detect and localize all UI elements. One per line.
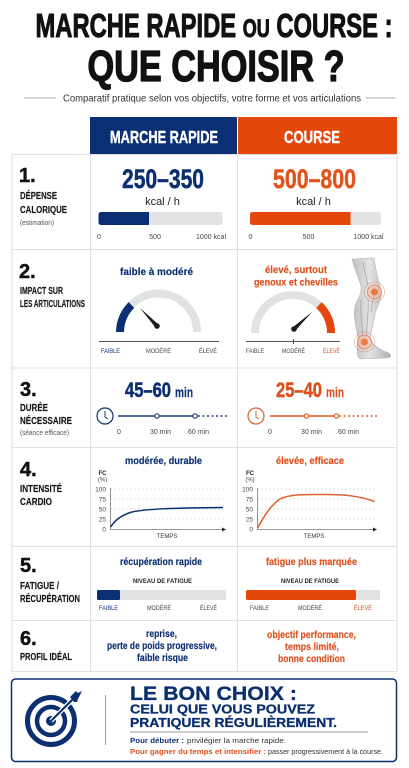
row 2 course: gauge: ÉLEVÉ [323, 346, 341, 355]
bar: calories marche [98, 212, 222, 225]
row 4 marche: line chart: 75 [99, 496, 106, 504]
row 1 label: dépense calorique: 1. [19, 165, 36, 187]
row 6 course: profile text [267, 629, 356, 665]
row 4 marche: line chart: TEMPS [157, 534, 177, 540]
needle [140, 308, 160, 329]
row 1 marche: calories: 1000 kcal [196, 234, 226, 241]
row 4 marche: line chart: 50 [99, 506, 106, 514]
row 2 marche: gauge: ÉLEVÉ [199, 346, 218, 355]
row 2 course: gauge: MODÉRÉ [282, 346, 306, 355]
row 3 marche: timeline: 60 min [188, 429, 209, 436]
row 4 course: line chart: 50 [246, 506, 253, 514]
row 3 marche: timeline: 30 min [150, 429, 171, 436]
bar: calories course [250, 212, 381, 225]
row 1 course: calories: kcal / h [296, 196, 331, 208]
row 3 course: timeline: 60 min [338, 429, 359, 436]
row 3 course: timeline: 30 min [301, 429, 322, 436]
row 4 marche: line chart: modérée, durable [125, 455, 202, 467]
row 4 label: intensité [20, 459, 62, 508]
row 1 marche: calories: kcal / h [145, 196, 180, 208]
row 3 course: timeline: min [326, 384, 344, 400]
row 4 course: line chart: FC [246, 471, 255, 477]
row 3 course: timeline [248, 379, 378, 436]
row 5 course: fatigue bar [246, 556, 380, 612]
row 5 course: fatigue bar: FAIBLE [250, 605, 270, 612]
row 2 marche: gauge: faible à modéré [120, 266, 193, 278]
callout heading [130, 684, 337, 730]
row 5 course: fatigue bar: NIVEAU DE FATIGUE [281, 578, 340, 585]
row 6 course: profile text: temps limité, [285, 641, 339, 653]
row 2 course: gauge: FAIBLE [246, 348, 265, 355]
row 3 marche: timeline: min [175, 384, 193, 400]
callout heading: PRATIQUER RÉGULIÈREMENT. [130, 715, 337, 730]
row 2 course: gauge: genoux et chevilles [254, 276, 338, 288]
row 1 course: calories: 500 [303, 234, 314, 241]
row 1 marche: calories: 500 [149, 234, 161, 241]
column header: course: COURSE [284, 127, 340, 147]
row 4 marche: line chart [95, 455, 226, 540]
callout advice [130, 736, 383, 756]
row 5 label: fatigue: FATIGUE / [20, 580, 59, 592]
row 4 course: line chart: élevée, efficace [276, 455, 344, 467]
row 4 marche: line chart: 25 [99, 516, 106, 524]
table grid [12, 154, 397, 672]
icon: leg with painful knee and ankle [352, 258, 391, 359]
row 4 course: line chart: 0 [249, 526, 253, 534]
row 4 course: line chart: 25 [246, 516, 253, 524]
column header: marche rapide: MARCHE RAPIDE [110, 127, 218, 147]
row 1 label: dépense calorique: DÉPENSE [20, 189, 57, 202]
row 3 label: durée: DURÉE [20, 401, 48, 414]
column header: marche rapide [90, 117, 237, 154]
ankle pain marker [354, 332, 374, 352]
row 3 label: durée: NÉCESSAIRE [20, 414, 72, 427]
row 4 label: intensité: CARDIO [20, 496, 52, 508]
row 1 label: dépense calorique [19, 165, 67, 227]
row 2 label: impact articulations: LES ARTICULATIONS [20, 298, 85, 310]
needle [291, 312, 312, 332]
row 3 course: timeline: 0 [268, 429, 272, 436]
row 2 label: impact articulations [19, 261, 85, 310]
row 5 course: fatigue bar: fatigue plus marquée [266, 556, 357, 568]
row 5 course: fatigue bar: ÉLEVÉ [354, 603, 373, 612]
row 4 label: intensité: INTENSITÉ [20, 482, 62, 495]
row 5 marche: fatigue bar: ÉLEVÉ [200, 603, 218, 612]
row 4 course: line chart: (%) [245, 478, 255, 484]
row 1 label: dépense calorique: (estimation) [20, 220, 54, 227]
row 3 label: durée: 3. [20, 379, 37, 401]
row 4 marche: line chart: 100 [95, 486, 106, 494]
row 5 label: fatigue [20, 555, 80, 605]
row 2 course: gauge: élevé, surtout [265, 264, 327, 276]
row 6 marche: profile text: reprise, [146, 628, 177, 640]
callout advice: Pour débuter : [130, 736, 184, 745]
row 6 label: profil idéal [20, 628, 72, 663]
row 6 label: profil idéal: PROFIL IDÉAL [20, 650, 72, 663]
column header: course [238, 117, 397, 154]
row 3 label: durée: (séance efficace) [20, 430, 69, 437]
row 6 course: profile text: objectif performance, [267, 629, 356, 641]
row 2 course: gauge [246, 264, 341, 355]
callout: le bon choix [12, 679, 396, 762]
icon: target with arrow [28, 691, 82, 744]
knee pain marker [364, 282, 384, 302]
row 2 label: impact articulations: 2. [19, 261, 36, 283]
row 3 course: timeline: 25–40 [276, 379, 322, 402]
row 3 marche: timeline: 45–60 [125, 379, 171, 402]
row 2 marche: gauge [99, 266, 219, 355]
callout advice: privilégier la marche rapide. [187, 736, 286, 745]
title [36, 7, 392, 91]
callout advice: passer progressivement à la course. [268, 747, 383, 756]
row 6 label: profil idéal: 6. [20, 628, 37, 650]
row 6 marche: profile text: faible risque [137, 652, 188, 664]
row 4 marche: line chart: 0 [102, 526, 106, 534]
row 1 marche: calories [97, 164, 226, 241]
row 5 course: fatigue bar: MODÉRÉ [298, 603, 323, 612]
row 1 course: calories: 0 [248, 234, 252, 241]
row 6 course: profile text: bonne condition [278, 653, 345, 665]
row 1 course: calories [248, 164, 384, 241]
subtitle: Comparatif pratique selon vos objectifs, votre forme et vos articulations [63, 94, 361, 104]
row 5 marche: fatigue bar [97, 556, 226, 612]
row 4 course: line chart: TEMPS [304, 534, 324, 540]
row 2 marche: gauge: MODÉRÉ [146, 346, 172, 355]
row 5 marche: fatigue bar: MODÉRÉ [147, 603, 172, 612]
row 4 course: line chart: 75 [246, 496, 253, 504]
row 3 marche: timeline [97, 379, 227, 436]
row 4 course: line chart: 100 [242, 486, 253, 494]
row 5 label: fatigue: RÉCUPÉRATION [20, 592, 80, 605]
row 4 marche: line chart: FC [98, 471, 107, 477]
row 1 label: dépense calorique: CALORIQUE [20, 204, 67, 216]
row 4 label: intensité: 4. [20, 459, 37, 481]
row 5 marche: fatigue bar: récupération rapide [120, 556, 202, 568]
row 1 marche: calories: 0 [97, 234, 101, 241]
callout advice: Pour gagner du temps et intensifier : [130, 747, 266, 756]
row 6 marche: profile text: perte de poids progressive, [107, 640, 217, 652]
title: QUE CHOISIR ? [88, 42, 344, 91]
row 2 label: impact articulations: IMPACT SUR [20, 285, 63, 297]
row 6 marche: profile text [107, 628, 217, 664]
row 1 marche: calories: 250–350 [122, 164, 204, 194]
row 2 marche: gauge: FAIBLE [101, 348, 121, 355]
row 1 course: calories: 1000 kcal [354, 234, 384, 241]
row 3 label: durée [20, 379, 72, 437]
icon: clock [97, 408, 113, 424]
icon: clock [248, 408, 264, 424]
row 3 marche: timeline: 0 [117, 429, 121, 436]
callout heading: LE BON CHOIX : [130, 684, 297, 705]
row 5 marche: fatigue bar: NIVEAU DE FATIGUE [133, 578, 193, 585]
row 4 marche: line chart: (%) [98, 478, 107, 484]
callout heading: CELUI QUE VOUS POUVEZ [130, 702, 315, 716]
row 5 marche: fatigue bar: FAIBLE [99, 605, 119, 612]
row 4 course: line chart [242, 455, 377, 540]
row 1 course: calories: 500–800 [273, 164, 356, 194]
row 5 label: fatigue: 5. [20, 555, 37, 577]
